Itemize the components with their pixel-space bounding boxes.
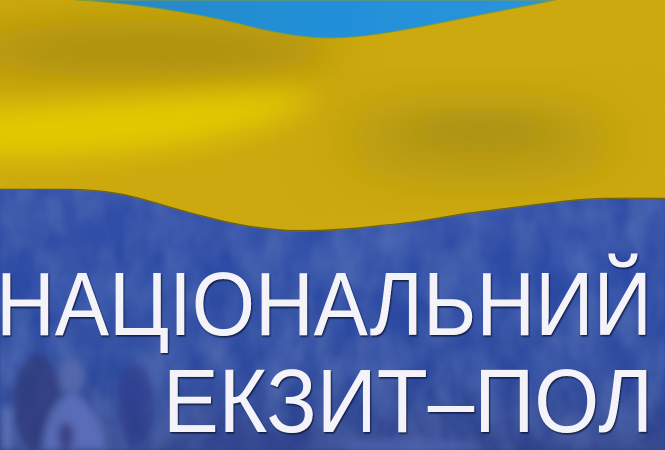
heading [0, 253, 653, 450]
crowd silhouettes [3, 354, 480, 450]
lower blue field [0, 180, 665, 450]
yellow flag band [0, 0, 665, 240]
upper sky-blue flag band [76, 0, 556, 38]
